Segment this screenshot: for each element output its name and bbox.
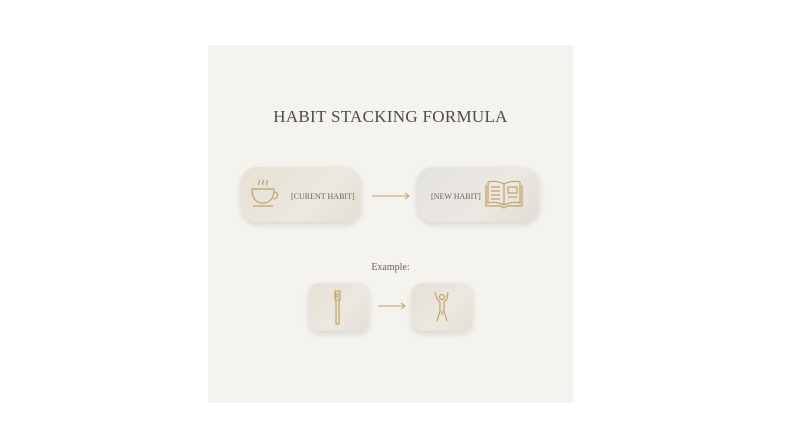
box: current habit [241, 167, 361, 222]
icon: coffee cup [251, 180, 278, 207]
panel: main [208, 45, 573, 403]
icon: stretching person [434, 292, 449, 322]
icon: toothbrush [334, 290, 341, 325]
label: new habit: [NEW HABIT] [431, 192, 481, 201]
box: toothbrush [309, 283, 369, 331]
arrow: example [378, 302, 406, 310]
arrow: main [372, 192, 410, 200]
box: exercise [412, 283, 472, 331]
box: new habit [417, 167, 539, 222]
title: HABIT STACKING FORMULA [273, 107, 508, 126]
label: current habit: [CURENT HABIT] [291, 192, 355, 201]
text: example: Example: [371, 262, 410, 273]
icon: book [485, 180, 523, 209]
